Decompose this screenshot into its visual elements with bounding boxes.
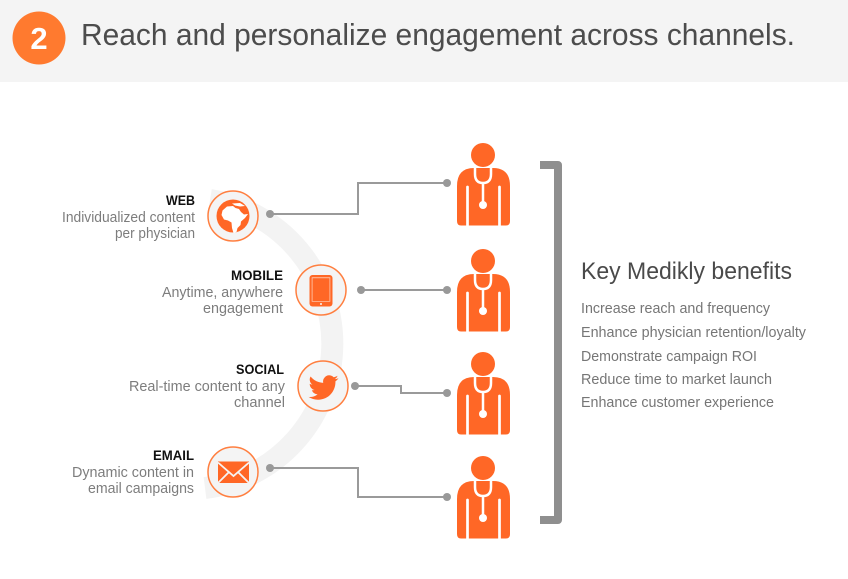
connector: email to physician	[266, 464, 451, 501]
mobile label: engagement	[203, 300, 284, 317]
step number badge: 2	[30, 21, 48, 56]
email label	[72, 447, 194, 497]
channel: social	[129, 361, 451, 411]
icon: tablet	[296, 265, 346, 315]
channel: mobile	[162, 265, 451, 317]
social label	[129, 361, 285, 411]
mobile label: Anytime, anywhere	[162, 284, 283, 301]
benefits list: Reduce time to market launch	[581, 371, 772, 388]
icon: envelope	[208, 447, 258, 497]
bracket	[540, 165, 558, 520]
email label: Dynamic content in	[72, 464, 194, 481]
web label	[62, 192, 196, 242]
web label: per physician	[115, 225, 195, 242]
icon: globe	[208, 191, 258, 241]
web label: Individualized content	[62, 209, 196, 226]
channel: email	[72, 447, 451, 501]
connector: web to physician	[266, 179, 451, 218]
physician figure 3	[457, 352, 510, 435]
mobile label	[162, 267, 284, 317]
benefits list: Enhance physician retention/loyalty	[581, 324, 806, 341]
physician figure 4	[457, 456, 510, 539]
benefits list	[581, 300, 806, 411]
benefits list: Demonstrate campaign ROI	[581, 348, 757, 365]
email label: EMAIL	[153, 447, 194, 463]
connector: social to physician	[351, 382, 451, 397]
channel: web	[62, 179, 451, 242]
benefits panel	[581, 258, 806, 411]
title: Reach and personalize engagement across channels.	[81, 17, 795, 52]
benefits heading: Key Medikly benefits	[581, 258, 792, 285]
header band	[0, 0, 848, 82]
social label: Real-time content to any	[129, 378, 285, 395]
physician figure 1	[457, 143, 510, 226]
benefits list: Increase reach and frequency	[581, 300, 770, 317]
icon: bird	[298, 361, 348, 411]
benefits list: Enhance customer experience	[581, 394, 774, 411]
web label: WEB	[166, 192, 195, 208]
email label: email campaigns	[88, 480, 194, 497]
social label: channel	[234, 394, 285, 411]
mobile label: MOBILE	[231, 267, 283, 283]
curved channel arc	[205, 200, 332, 488]
physician figure 2	[457, 249, 510, 332]
step number badge	[12, 12, 66, 64]
connector: mobile to physician	[357, 286, 451, 294]
social label: SOCIAL	[236, 361, 284, 377]
